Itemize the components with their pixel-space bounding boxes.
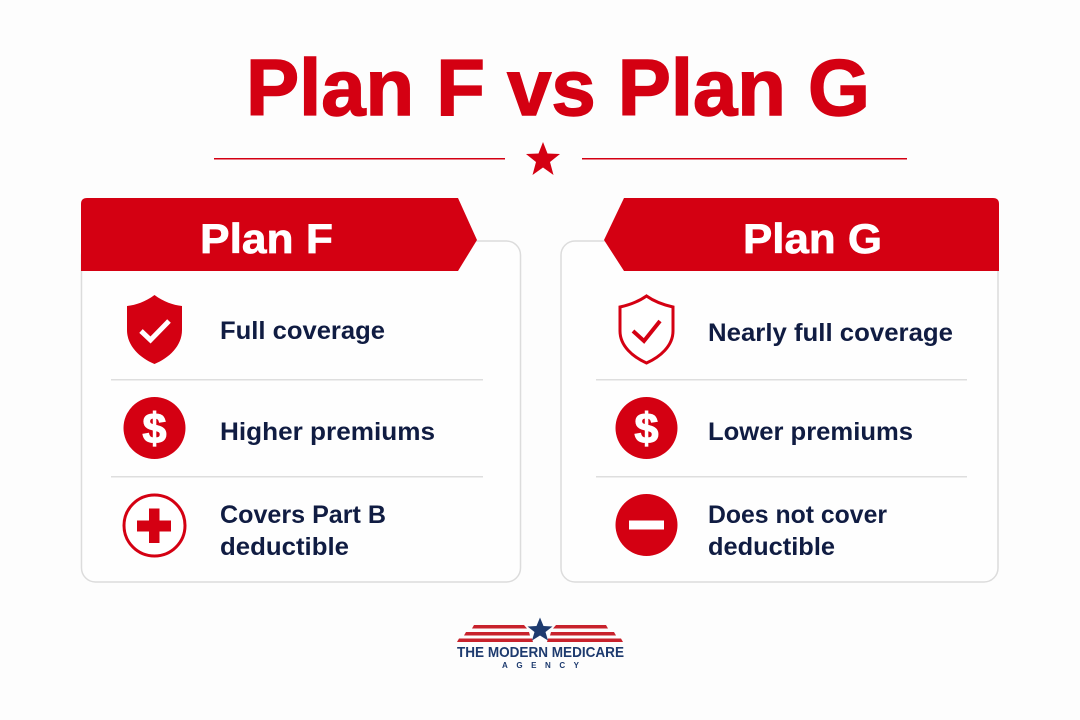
text: covers part B deductible: deductible	[220, 533, 349, 561]
row: does not cover deductible	[616, 494, 887, 561]
logo stripes	[457, 625, 623, 642]
panel: Plan G	[561, 198, 999, 582]
title: Plan F vs Plan G	[246, 43, 870, 132]
title divider with star	[214, 142, 907, 175]
text: does not cover deductible: Does not cover	[708, 501, 887, 529]
row: nearly full coverage	[620, 296, 953, 363]
panel: Plan F	[81, 198, 520, 582]
icon: medical cross circle	[124, 495, 185, 556]
icon: minus circle	[616, 494, 678, 556]
icon: dollar circle: $	[635, 405, 659, 453]
icon: dollar circle: $	[143, 405, 167, 453]
banner: Plan G	[604, 198, 999, 271]
logo: The Modern Medicare Agency	[457, 618, 624, 670]
icon: dollar circle	[616, 397, 678, 459]
icon: dollar circle	[124, 397, 186, 459]
logo wordmark: THE MODERN MEDICARE	[457, 644, 624, 661]
icon: outlined shield with check	[620, 296, 673, 363]
banner: Plan F	[81, 198, 477, 271]
logo subtitle: AGENCY	[502, 661, 580, 670]
card outline: Plan G	[561, 241, 998, 582]
row: higher premiums	[124, 397, 435, 459]
banner: Plan G: Plan G	[743, 215, 882, 262]
row: lower premiums	[616, 397, 913, 459]
text: lower premiums: Lower premiums	[708, 418, 913, 446]
text: full coverage: Full coverage	[220, 317, 385, 345]
row: full coverage	[127, 295, 385, 364]
text: nearly full coverage: Nearly full coverage	[708, 319, 953, 347]
text: higher premiums: Higher premiums	[220, 418, 435, 446]
banner: Plan F: Plan F	[200, 215, 333, 262]
icon: solid shield with check	[127, 295, 182, 364]
logo star	[528, 618, 552, 640]
text: does not cover deductible: deductible	[708, 533, 835, 561]
card outline: Plan F	[82, 241, 520, 582]
text: covers part B deductible: Covers Part B	[220, 501, 386, 529]
row: covers part B deductible	[124, 495, 386, 561]
